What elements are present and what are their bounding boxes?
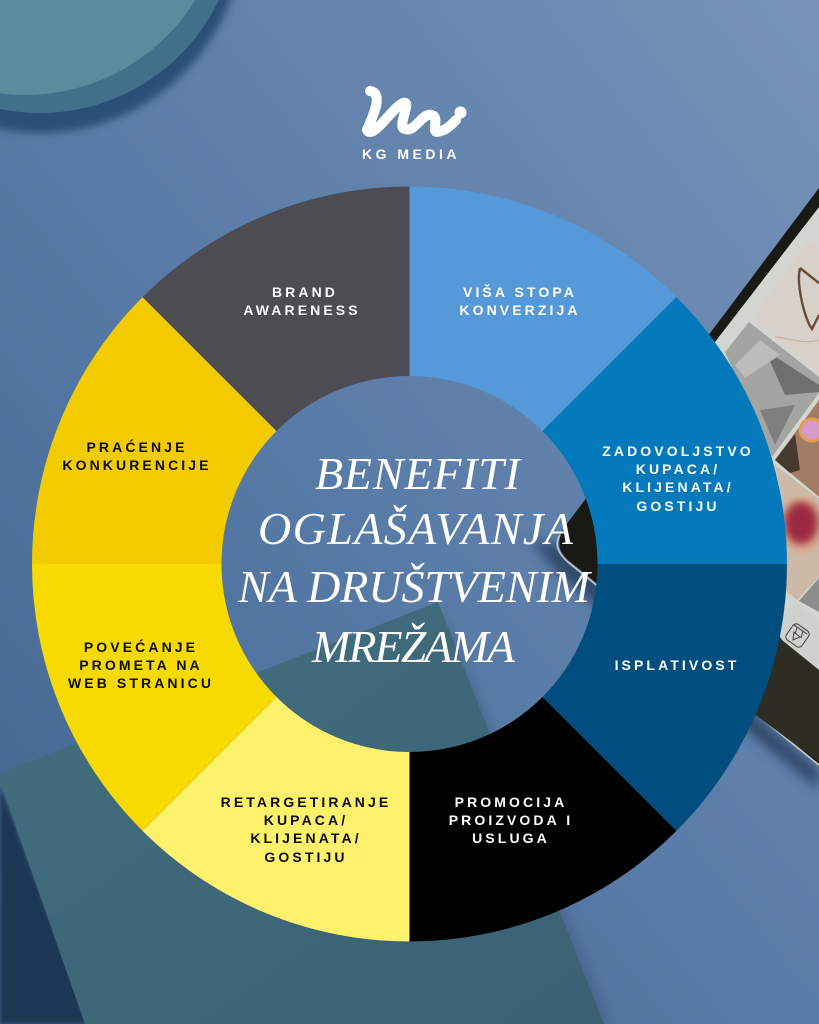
logo wordmark: KG MEDIA [362, 146, 460, 162]
logo mark [367, 91, 466, 132]
label: povećanje prometa: POVEĆANJE [84, 638, 198, 655]
photo: glasses [752, 240, 819, 373]
label: viša stopa konverzija: KONVERZIJA [459, 302, 581, 318]
icon: reels [784, 622, 811, 649]
segment: povećanje prometa [32, 564, 276, 831]
segment: isplativost [542, 564, 787, 831]
light bar with reels icon [770, 602, 819, 670]
logo: KG Media [362, 91, 466, 162]
label: praćenje konkurencije: KONKURENCIJE [62, 457, 212, 473]
label: zadovoljstvo: ZADOVOLJSTVO [602, 443, 754, 459]
segment: promocija [410, 697, 676, 942]
label: retargetiranje: RETARGETIRANJE [221, 794, 391, 810]
label: zadovoljstvo: KUPACA/ [636, 461, 720, 477]
segment: zadovoljstvo [542, 297, 787, 564]
label: promocija: USLUGA [472, 830, 550, 846]
photo: greyscale [725, 322, 819, 457]
label: retargetiranje: KLIJENATA/ [250, 830, 362, 846]
label: zadovoljstvo: KLIJENATA/ [622, 479, 734, 495]
round teal disc, top left [0, 0, 243, 133]
segment: viša stopa konverzija [410, 186, 676, 431]
label: viša stopa konverzija: VIŠA STOPA [463, 283, 577, 300]
label: povećanje prometa: WEB STRANICU [68, 675, 214, 691]
label: povećanje prometa: PROMETA NA [79, 657, 203, 673]
dark lower bezel [700, 620, 819, 762]
segment: brand awareness [143, 186, 410, 431]
title: OGLAŠAVANJA [258, 503, 574, 554]
label: isplativost: ISPLATIVOST [615, 657, 739, 673]
donut chart [32, 186, 787, 942]
title: BENEFITI [315, 448, 523, 499]
photo: portrait with pink glasses [775, 400, 819, 497]
segment: praćenje konkurencije [32, 297, 276, 564]
label: promocija: PROMOCIJA [455, 794, 567, 810]
label: brand awareness: BRAND [272, 284, 338, 300]
label: praćenje konkurencije: PRAĆENJE [86, 438, 188, 455]
label: retargetiranje: GOSTIJU [264, 849, 348, 865]
phone with photo feed, right [530, 188, 819, 790]
label: retargetiranje: KUPACA/ [264, 812, 348, 828]
title: MREŽAMA [311, 621, 516, 672]
photo: red blush [775, 465, 819, 600]
label: brand awareness: AWARENESS [243, 302, 361, 318]
title: NA DRUŠTVENIM [237, 561, 593, 612]
phone body [559, 188, 819, 765]
teal notebook, bottom [0, 602, 612, 1024]
photo: next grey tile [799, 578, 819, 612]
phone pale rim [557, 535, 819, 765]
label: promocija: PROIZVODA I [449, 812, 573, 828]
segment: retargetiranje [143, 697, 410, 942]
label: zadovoljstvo: GOSTIJU [636, 498, 720, 514]
phone screen [640, 207, 819, 645]
phone shadow [530, 540, 819, 790]
